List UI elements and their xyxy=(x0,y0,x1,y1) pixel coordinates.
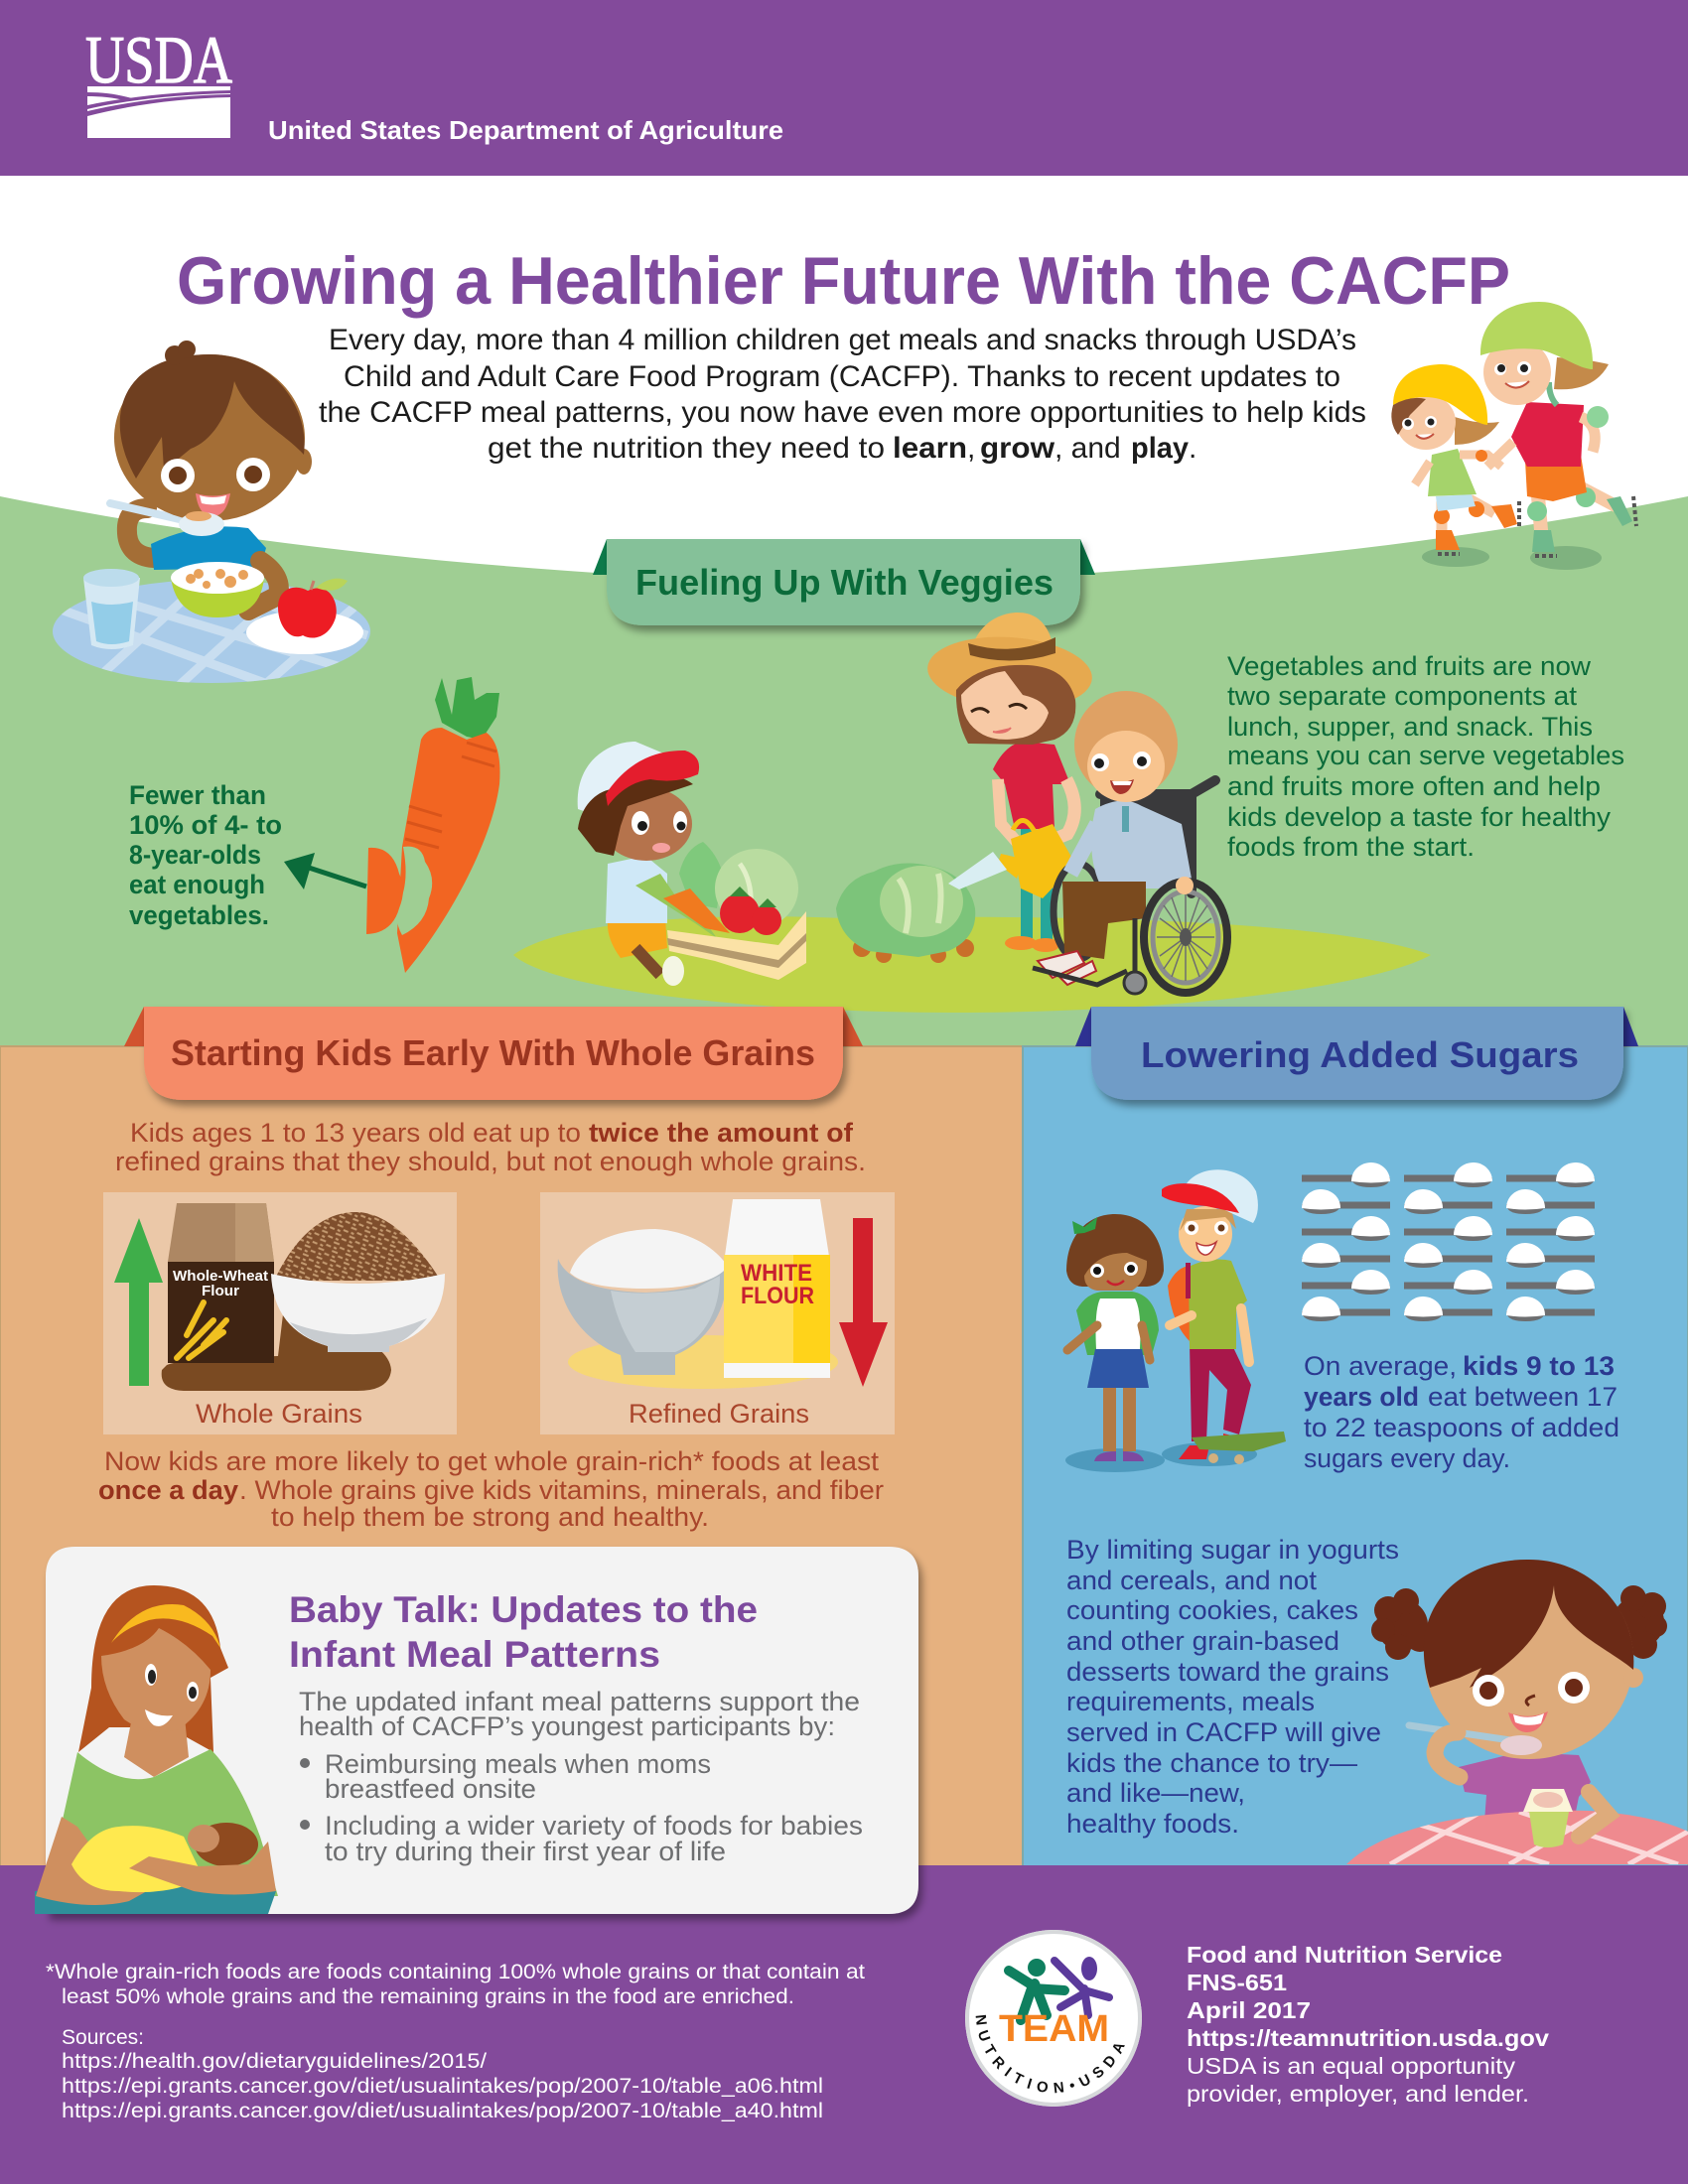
older child xyxy=(1480,302,1636,556)
illustration: mother with baby xyxy=(35,1585,278,1914)
footer band xyxy=(0,1865,1688,2184)
icon: bitten carrot xyxy=(366,677,499,973)
grains body text: . Whole grains give kids vitamins, minerals, and fiber xyxy=(239,1475,884,1505)
illustration: skating children xyxy=(1391,302,1636,570)
illustration: two school kids xyxy=(1065,1169,1286,1472)
agency contact block xyxy=(1187,1942,1549,2107)
agency contact block: USDA is an equal opportunity xyxy=(1187,2053,1516,2079)
vegetable text: lunch, supper, and snack. This xyxy=(1227,712,1593,742)
plaid placemat xyxy=(53,582,370,683)
body text: health of CACFP’s youngest participants by: xyxy=(299,1711,835,1741)
green figure xyxy=(1009,1959,1064,2020)
stat: fewer than 10 percent: eat enough xyxy=(129,870,265,899)
footnote and sources: https://epi.grants.cancer.gov/diet/usualintakes/pop/2007-10/table_a40.html xyxy=(62,2100,823,2122)
footnote and sources: *Whole grain-rich foods are foods containing 100% whole grains or that contain at xyxy=(46,1961,865,1983)
far wheel xyxy=(1054,864,1103,959)
illustration: girl watering with can xyxy=(925,613,1094,952)
intro text: learn xyxy=(893,432,967,465)
vegetable text: foods from the start. xyxy=(1227,832,1475,862)
agency contact block: April 2017 xyxy=(1187,1997,1311,2023)
glass of water xyxy=(83,569,140,649)
sugar body text: and like—new, xyxy=(1066,1778,1245,1808)
ground ellipse xyxy=(513,916,1431,1013)
agency contact block: FNS-651 xyxy=(1187,1970,1287,1995)
footnote and sources: https://epi.grants.cancer.gov/diet/usualintakes/pop/2007-10/table_a06.html xyxy=(62,2075,823,2098)
vegetable text: two separate components at xyxy=(1227,681,1578,711)
header band xyxy=(0,0,1688,176)
shirt xyxy=(1459,1752,1591,1822)
mouth xyxy=(196,493,230,516)
mother's right arm xyxy=(129,1842,276,1894)
hair and face xyxy=(956,665,1075,745)
hair xyxy=(1424,1560,1633,1688)
panel: Baby Talk card: Infant Meal Patterns xyxy=(289,1634,660,1675)
footnote and sources xyxy=(46,1961,865,2122)
sugar body text: healthy foods. xyxy=(1066,1809,1239,1839)
intro text: grow xyxy=(980,432,1055,465)
plate and apple xyxy=(246,579,363,654)
intro text: play xyxy=(1131,432,1189,465)
grains intro text: Kids ages 1 to 13 years old eat up to xyxy=(130,1118,581,1148)
footnote and sources: least 50% whole grains and the remaining grains in the food are enriched. xyxy=(62,1985,794,2008)
panel: refined grains graphic xyxy=(540,1192,895,1434)
icon: rows of sugar teaspoons xyxy=(1302,1162,1595,1321)
illustration: boy with vegetable crate xyxy=(578,742,806,986)
sugar stat text: sugars every day. xyxy=(1304,1443,1510,1473)
icon: red down arrow xyxy=(839,1218,888,1387)
grains body text: once a day xyxy=(98,1475,238,1505)
stat: fewer than 10 percent: Fewer than xyxy=(129,780,266,810)
illustration: boy in wheelchair xyxy=(1033,691,1227,994)
icon: Team Nutrition seal xyxy=(965,1930,1142,2107)
sugar stat text: to 22 teaspoons of added xyxy=(1304,1413,1619,1442)
sugar body text xyxy=(1066,1535,1399,1839)
circular wordmark xyxy=(976,2015,1131,2093)
flour bag xyxy=(168,1203,274,1363)
sugar body text: requirements, meals xyxy=(1066,1687,1315,1716)
plate xyxy=(568,1335,838,1389)
illustration: cabbage plant xyxy=(836,864,975,963)
face xyxy=(101,1628,211,1731)
illustration: boy eating cereal xyxy=(50,341,370,695)
intro text: the CACFP meal patterns, you now have even more opportunities to help kids xyxy=(319,396,1366,429)
grains body text xyxy=(98,1446,884,1532)
sugar body text: counting cookies, cakes xyxy=(1066,1595,1358,1625)
grain pile xyxy=(274,1212,441,1281)
left arm xyxy=(36,1817,174,1905)
purple figure xyxy=(1055,1957,1109,2015)
sugar stat text: kids 9 to 13 xyxy=(1463,1351,1615,1381)
vegetable text: and fruits more often and help xyxy=(1227,771,1601,801)
yogurt cup xyxy=(1523,1789,1573,1847)
label: Whole Grains xyxy=(196,1399,362,1429)
sugar body text: and cereals, and not xyxy=(1066,1566,1317,1595)
intro text: Child and Adult Care Food Program (CACFP). Thanks to recent updates to xyxy=(344,360,1340,393)
bowl of cereal xyxy=(171,562,264,617)
shadows xyxy=(1065,1448,1165,1472)
right arm xyxy=(1579,1792,1609,1837)
department name: United States Department of Agriculture xyxy=(268,115,783,145)
stat: fewer than 10 percent: 8-year-olds xyxy=(129,840,261,870)
rice dome xyxy=(570,1229,728,1289)
crate xyxy=(667,911,806,980)
mouth xyxy=(1508,1711,1548,1732)
caster xyxy=(1124,972,1146,994)
body text xyxy=(299,1687,863,1866)
sugar body text: desserts toward the grains xyxy=(1066,1657,1389,1687)
neck xyxy=(124,1707,189,1777)
grains intro text xyxy=(115,1118,866,1176)
teal skirt xyxy=(35,1886,276,1914)
sugar stat text xyxy=(1304,1351,1619,1473)
shirt and arms xyxy=(1091,801,1192,888)
section heading: Lowering Added Sugars xyxy=(1075,1007,1638,1100)
vegetable text: means you can serve vegetables xyxy=(1227,741,1624,770)
body text: breastfeed onsite xyxy=(325,1774,536,1804)
hand xyxy=(1176,877,1194,894)
water spray xyxy=(948,852,1007,889)
sugar stat text: eat between 17 xyxy=(1428,1382,1618,1412)
intro text: get the nutrition they need to xyxy=(488,432,885,465)
white flour bag: WHITE xyxy=(741,1260,812,1287)
baby head xyxy=(195,1823,258,1866)
grains intro text: refined grains that they should, but not enough whole grains. xyxy=(115,1147,866,1176)
section heading: Fueling Up With Veggies xyxy=(593,539,1095,625)
spoon bowl xyxy=(179,512,224,536)
straw hat xyxy=(970,613,1055,660)
intro text: . xyxy=(1189,432,1196,465)
eyes xyxy=(1473,1675,1504,1706)
section heading: Whole Grains xyxy=(124,1007,863,1100)
flour bag: Flour xyxy=(202,1283,239,1299)
label: Refined Grains xyxy=(629,1399,809,1429)
head xyxy=(296,449,312,475)
boy xyxy=(1162,1169,1286,1464)
white flour bag xyxy=(724,1199,830,1378)
headband xyxy=(111,1604,220,1648)
agency contact block: https://teamnutrition.usda.gov xyxy=(1187,2025,1549,2051)
table cloth xyxy=(1346,1807,1688,1864)
bread board xyxy=(162,1314,391,1391)
shoes xyxy=(1038,951,1084,978)
sugar stat text: years old xyxy=(1304,1382,1419,1412)
watering can xyxy=(1013,820,1035,832)
baby blanket xyxy=(71,1826,204,1892)
agency contact block: provider, employer, and lender. xyxy=(1187,2081,1529,2107)
body text: to try during their first year of life xyxy=(325,1837,726,1866)
intro text xyxy=(319,324,1366,465)
flour bag: Whole-Wheat xyxy=(173,1268,268,1285)
shirt xyxy=(151,526,266,570)
big wheel xyxy=(1144,882,1227,993)
title: Growing a Healthier Future With the CACFP xyxy=(177,243,1510,319)
agency contact block: Food and Nutrition Service xyxy=(1187,1942,1502,1968)
vegetable text: Vegetables and fruits are now xyxy=(1227,651,1592,681)
hair xyxy=(120,354,305,478)
sugar body text: kids the chance to try— xyxy=(1066,1748,1357,1778)
vegetables in crate xyxy=(635,842,798,938)
TEAM wordmark: TEAM xyxy=(999,2008,1109,2050)
stat: fewer than 10 percent xyxy=(129,780,282,930)
section heading: Lowering Added Sugars: Lowering Added Sugars xyxy=(1141,1034,1579,1075)
head xyxy=(1425,1561,1633,1759)
nose xyxy=(1526,1696,1535,1706)
panel: whole grains graphic xyxy=(103,1192,457,1434)
buns xyxy=(1371,1585,1667,1660)
grains body text: Now kids are more likely to get whole grain-rich* foods at least xyxy=(104,1446,880,1476)
panel: added sugars background xyxy=(1023,1046,1688,1866)
pants xyxy=(1062,882,1146,959)
stat: fewer than 10 percent: 10% of 4- to xyxy=(129,810,282,840)
stat: fewer than 10 percent: vegetables. xyxy=(129,900,269,930)
icon: green up arrow xyxy=(114,1218,163,1386)
panel: Baby Talk card xyxy=(35,1547,918,1914)
head xyxy=(1074,691,1178,798)
icon: Team Nutrition seal: NUTRITION•USDA xyxy=(975,2015,1125,2093)
body text: Reimbursing meals when moms xyxy=(325,1749,711,1779)
gray bowl xyxy=(558,1259,728,1375)
panel: whole grains background xyxy=(0,1046,1023,1866)
grains intro text: twice the amount of xyxy=(589,1118,854,1148)
intro text: Every day, more than 4 million children get meals and snacks through USDA’s xyxy=(329,324,1356,356)
vegetable text xyxy=(1227,651,1624,862)
USDA logo: USDA xyxy=(85,22,232,97)
footnote and sources: Sources: xyxy=(62,2026,144,2049)
arrow: bitten carrot to stat xyxy=(284,853,366,889)
vegetable text: kids develop a taste for healthy xyxy=(1227,802,1612,832)
section heading: Fueling Up With Veggies: Fueling Up With Veggies xyxy=(635,562,1054,603)
body text: The updated infant meal patterns support the xyxy=(299,1687,860,1716)
shirt xyxy=(46,1749,278,1896)
sugar stat text: On average, xyxy=(1304,1351,1457,1381)
sugar body text: and other grain-based xyxy=(1066,1626,1339,1656)
girl xyxy=(1066,1214,1164,1461)
green hill background xyxy=(0,496,1688,1048)
section heading: Whole Grains: Starting Kids Early With Whole Grains xyxy=(171,1032,815,1073)
shadows xyxy=(1422,547,1489,567)
illustration: girl eating yogurt xyxy=(1346,1560,1688,1864)
footnote and sources: https://health.gov/dietaryguidelines/2015/ xyxy=(62,2050,487,2073)
USDA logo xyxy=(85,22,232,138)
spoon and hand xyxy=(1409,1725,1524,1742)
body text: Including a wider variety of foods for babies xyxy=(325,1811,863,1841)
sugar body text: By limiting sugar in yogurts xyxy=(1066,1535,1399,1565)
eyes xyxy=(161,459,195,492)
heading: Baby Talk: Updates to the xyxy=(289,1589,758,1630)
arm and spoon xyxy=(127,508,154,558)
intro text: , and xyxy=(1055,432,1121,465)
white flour bag: FLOUR xyxy=(741,1283,814,1309)
right arm xyxy=(248,561,279,611)
intro text: , xyxy=(967,432,975,465)
sugar body text: served in CACFP will give xyxy=(1066,1717,1381,1747)
white bowl xyxy=(271,1274,445,1352)
grains body text: to help them be strong and healthy. xyxy=(271,1502,709,1532)
wheelchair frame xyxy=(1100,780,1215,893)
hair xyxy=(78,1585,228,1752)
younger child xyxy=(1391,364,1519,554)
